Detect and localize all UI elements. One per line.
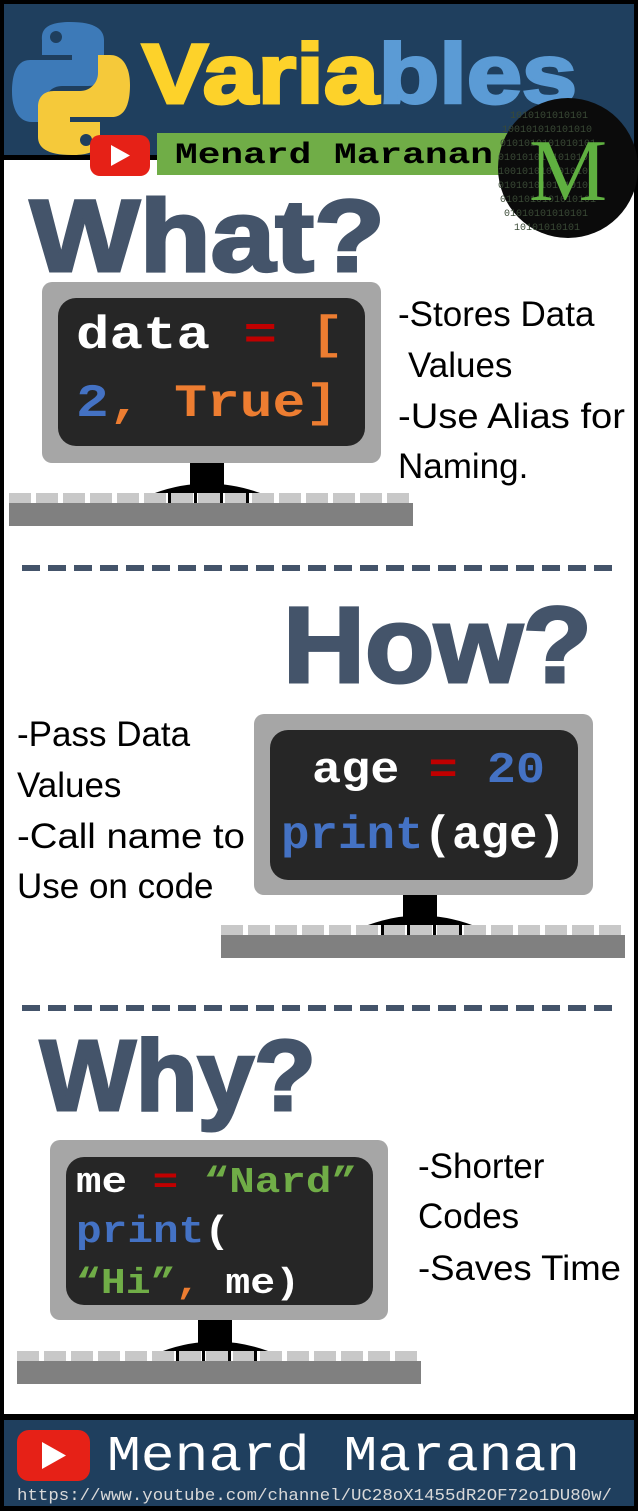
icon: M logo circle: 0101010101010101	[500, 195, 596, 206]
computer: why	[17, 1140, 421, 1384]
heading: Why?: Why?	[40, 1020, 316, 1132]
text: why description	[418, 1147, 621, 1288]
text: how description: -Call name to	[17, 817, 245, 856]
computer: what: 2, True]	[76, 378, 338, 430]
icon: python logo	[12, 22, 130, 155]
text: how description: Use on code	[17, 867, 214, 906]
text: what description: -Stores Data	[398, 295, 595, 334]
text: why description: -Saves Time	[418, 1249, 621, 1288]
icon: M logo circle: 01010101010101	[504, 209, 588, 220]
text: how description	[17, 715, 245, 906]
code: age: age = 20	[312, 746, 545, 796]
footer: Menard Maranan	[107, 1429, 580, 1486]
computer: why: print (	[76, 1211, 230, 1254]
text: why description: Codes	[418, 1197, 519, 1236]
heading: What?: What?	[30, 179, 385, 293]
computer: how	[221, 714, 625, 958]
code: data: data = [	[76, 310, 344, 362]
footer: https://www.youtube.com/channel/UC28oX1455dR2OF72o1DU80w/	[17, 1487, 612, 1506]
icon: M logo circle: 10101010101	[514, 223, 580, 234]
code: me: me = “Nard”	[76, 1162, 357, 1203]
icon: M logo circle: 100101010101010	[502, 125, 592, 136]
text: what description	[398, 295, 625, 486]
icon: M logo circle: 1001010101010101	[498, 167, 594, 178]
icon: M logo circle: 0101010101010101	[498, 181, 594, 192]
footer	[4, 1420, 634, 1506]
icon: M logo circle: 0101010101010101	[500, 139, 596, 150]
text: how description: Values	[17, 766, 121, 805]
icon: M logo circle: M	[529, 123, 607, 220]
header banner	[4, 4, 634, 155]
icon: footer youtube	[17, 1430, 90, 1481]
text: why description: -Shorter	[418, 1147, 545, 1186]
title: Varia bles	[142, 27, 577, 121]
text: what description: Values	[408, 346, 512, 385]
channel name bar	[157, 133, 510, 175]
channel name bar: Menard Maranan	[175, 139, 493, 173]
computer: what	[9, 282, 413, 526]
text: how description: -Pass Data	[17, 715, 191, 754]
text: what description: Naming.	[398, 447, 528, 486]
computer: why: “Hi” , me)	[76, 1263, 300, 1304]
heading: How?: How?	[283, 584, 592, 705]
text: what description: -Use Alias for	[398, 397, 625, 436]
icon: M logo circle: 0101010101010101	[498, 153, 594, 164]
icon: M logo circle	[498, 98, 638, 238]
icon: M logo circle: 1010101010101	[510, 111, 588, 122]
computer: how: print(age)	[281, 810, 566, 862]
icon: youtube	[90, 135, 150, 176]
